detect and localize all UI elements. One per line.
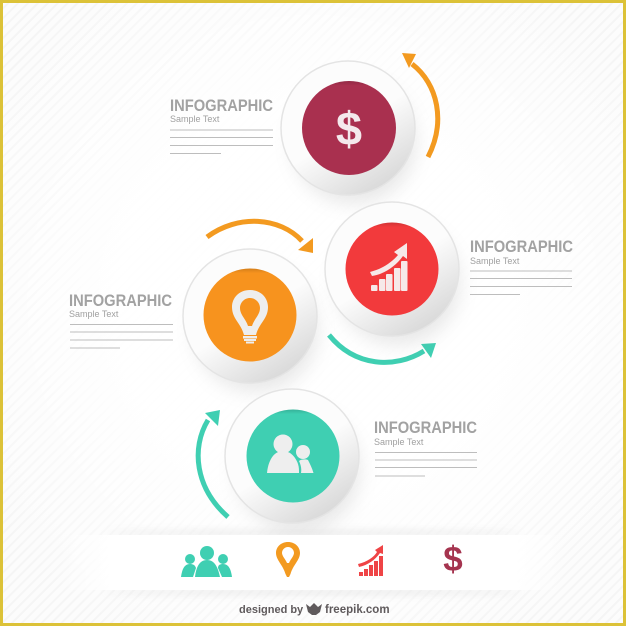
- arrow: orange top right: [402, 53, 438, 157]
- arrow: orange middle: [207, 221, 313, 253]
- text block: top: INFOGRAPHIC: [170, 97, 273, 115]
- icon: team: [181, 546, 232, 577]
- icon: dollar: $: [336, 102, 362, 155]
- footer credit: freepik.com: [325, 604, 390, 616]
- icon: small growth chart: [358, 545, 383, 576]
- text block: bottom: Sample Text: [374, 437, 424, 447]
- icon: small bulb: [276, 542, 300, 577]
- arrow: teal middle: [329, 335, 436, 362]
- text block: bottom: INFOGRAPHIC: [374, 419, 477, 437]
- text block: right: [470, 238, 573, 295]
- icon: bulb: [232, 290, 268, 344]
- text block: right: Sample Text: [470, 256, 520, 266]
- step: bulb circle: [183, 249, 318, 392]
- text block: top: [170, 97, 273, 154]
- text block: bottom: [374, 419, 477, 476]
- arrow: teal lower left: [198, 410, 228, 517]
- text block: left: [69, 292, 173, 348]
- footer credit: [239, 603, 390, 616]
- text block: left: Sample Text: [69, 309, 119, 319]
- icon: small dollar: $: [443, 540, 463, 579]
- text block: top: Sample Text: [170, 114, 220, 124]
- step: people circle: [225, 389, 360, 532]
- text block: right: INFOGRAPHIC: [470, 238, 573, 256]
- step: dollar circle: [281, 61, 416, 204]
- step: growth circle: [325, 202, 460, 345]
- icon: people: [267, 434, 314, 473]
- text block: left: INFOGRAPHIC: [69, 292, 172, 310]
- footer credit: designed by: [239, 604, 304, 616]
- icon: growth chart: [370, 243, 408, 291]
- icon strip: [60, 532, 566, 594]
